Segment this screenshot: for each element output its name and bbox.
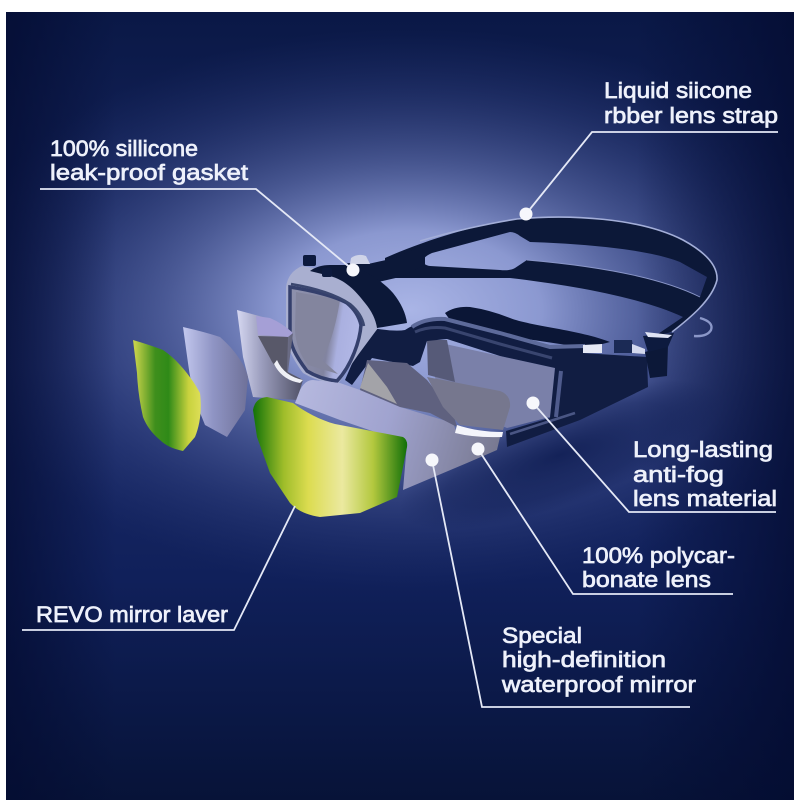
left lens inner shade [295,292,340,374]
label: strap [604,78,778,128]
small side loop [694,318,712,336]
label: gasket: 100% sillicone [50,136,198,161]
right frame, bridge and side block [345,318,648,447]
right rear gasket [445,307,610,348]
label: anti-fog: Long-lasting [633,437,773,462]
label: polycarbonate: 100% polycar- [582,543,735,568]
layer: white lens rim [455,425,503,437]
label: gasket [50,136,249,185]
label: polycarbonate [582,543,735,592]
layer: beige glass area [360,363,397,404]
label: mirror: waterproof mirror [501,672,697,697]
callout leader lines [22,132,778,707]
layer: small mirror lens [133,340,201,451]
leader: mirror [432,460,690,707]
lens layers [133,310,510,517]
leader: anti-fog [533,403,776,512]
label: polycarbonate: bonate lens [582,567,711,592]
label: gasket: leak-proof gasket [50,160,249,185]
label: anti-fog: lens material [633,486,777,511]
layer: white curved rim [274,360,303,383]
label: mirror: Special [502,623,582,648]
label: anti-fog: anti-fog [633,462,724,487]
right strap buckle [614,332,674,378]
silicone head strap [385,217,717,336]
cast shadow under goggles [383,350,737,560]
right lens [427,340,555,428]
label: mirror [501,623,697,697]
label: strap: rbber lens strap [604,103,778,128]
label: anti-fog [633,437,777,511]
left lens [290,287,360,380]
layer: frosted lens left [183,327,248,437]
leader: gasket [40,189,353,270]
label: strap: Liquid siicone [604,78,752,103]
rear strap connector [347,244,425,282]
layer: large mirror lens [253,397,407,517]
goggles [286,217,717,447]
layer: clear rear pane [237,310,303,400]
label: revo: REVO mirror laver [36,602,229,627]
layer: dark curved inner pane [258,336,303,383]
layer: grey rounded pane [427,377,510,430]
layer: darker middle lens [360,360,457,427]
top pins [303,255,332,277]
leader: strap [526,132,778,214]
right lens dark area [427,340,455,382]
leader: polycarbonate [478,449,733,594]
label: mirror: high-definition [502,647,666,672]
left gasket bridge [310,265,407,328]
left frame body [286,266,378,384]
layer: purple tint highlight [256,316,293,337]
layer: waterproof mirror pane [295,380,500,490]
left frame outline [290,284,364,381]
callout dots [346,208,540,466]
leader: revo [22,506,295,630]
